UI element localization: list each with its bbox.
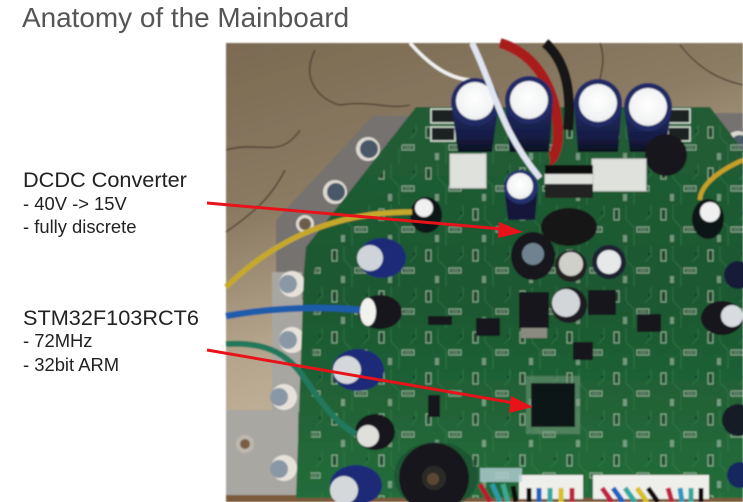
- plate hole: [296, 215, 314, 233]
- heading: DCDC Converter: DCDC Converter: [23, 167, 187, 192]
- capacitor small top: [504, 187, 538, 220]
- circuit board: [296, 107, 743, 498]
- metal base plate: [226, 113, 743, 492]
- wire: blue: [226, 308, 360, 316]
- wire: red: [500, 43, 558, 160]
- text: converter details: - fully discrete: [23, 216, 136, 237]
- title: Anatomy of the Mainboard: [22, 2, 349, 33]
- marble cracks: [226, 43, 743, 232]
- capacitors center: [555, 250, 587, 282]
- text: converter details: - 40V -> 15V: [23, 192, 127, 214]
- wire: green: [226, 344, 356, 434]
- marble background: [226, 43, 743, 502]
- MOSFETs and SOIC chips: [428, 290, 661, 417]
- board traces and components: [310, 125, 743, 498]
- wire: white left: [410, 43, 470, 80]
- text: converter details: [23, 192, 136, 237]
- text: chip details: [23, 330, 119, 374]
- wire: yellow right: [700, 160, 743, 200]
- arrow: to DCDC converter: [207, 203, 523, 238]
- mounting screws: [270, 131, 743, 481]
- text: chip details: - 72MHz: [23, 330, 92, 351]
- top capacitors: [451, 76, 672, 152]
- connector wires: [480, 484, 701, 502]
- black inductors: [541, 208, 597, 246]
- bottom table edge: [226, 495, 743, 502]
- STM32 microcontroller chip: [526, 376, 580, 434]
- wire: yellow left: [226, 212, 412, 287]
- buzzer: [394, 442, 478, 502]
- wire: black: [545, 43, 569, 130]
- inductor right: [645, 134, 687, 176]
- wire: white over capacitors: [472, 43, 540, 178]
- arrow: to STM32 chip: [207, 350, 533, 413]
- capacitors left: [410, 197, 442, 233]
- bottom connectors: [480, 468, 709, 499]
- heading: STM32F103RCT6: STM32F103RCT6: [23, 305, 199, 330]
- label: STM32 microcontroller: [23, 305, 199, 374]
- label: DCDC converter: [23, 167, 187, 237]
- diodes top: [431, 109, 690, 141]
- text: chip details: - 32bit ARM: [23, 354, 119, 374]
- connectors top: [450, 154, 646, 191]
